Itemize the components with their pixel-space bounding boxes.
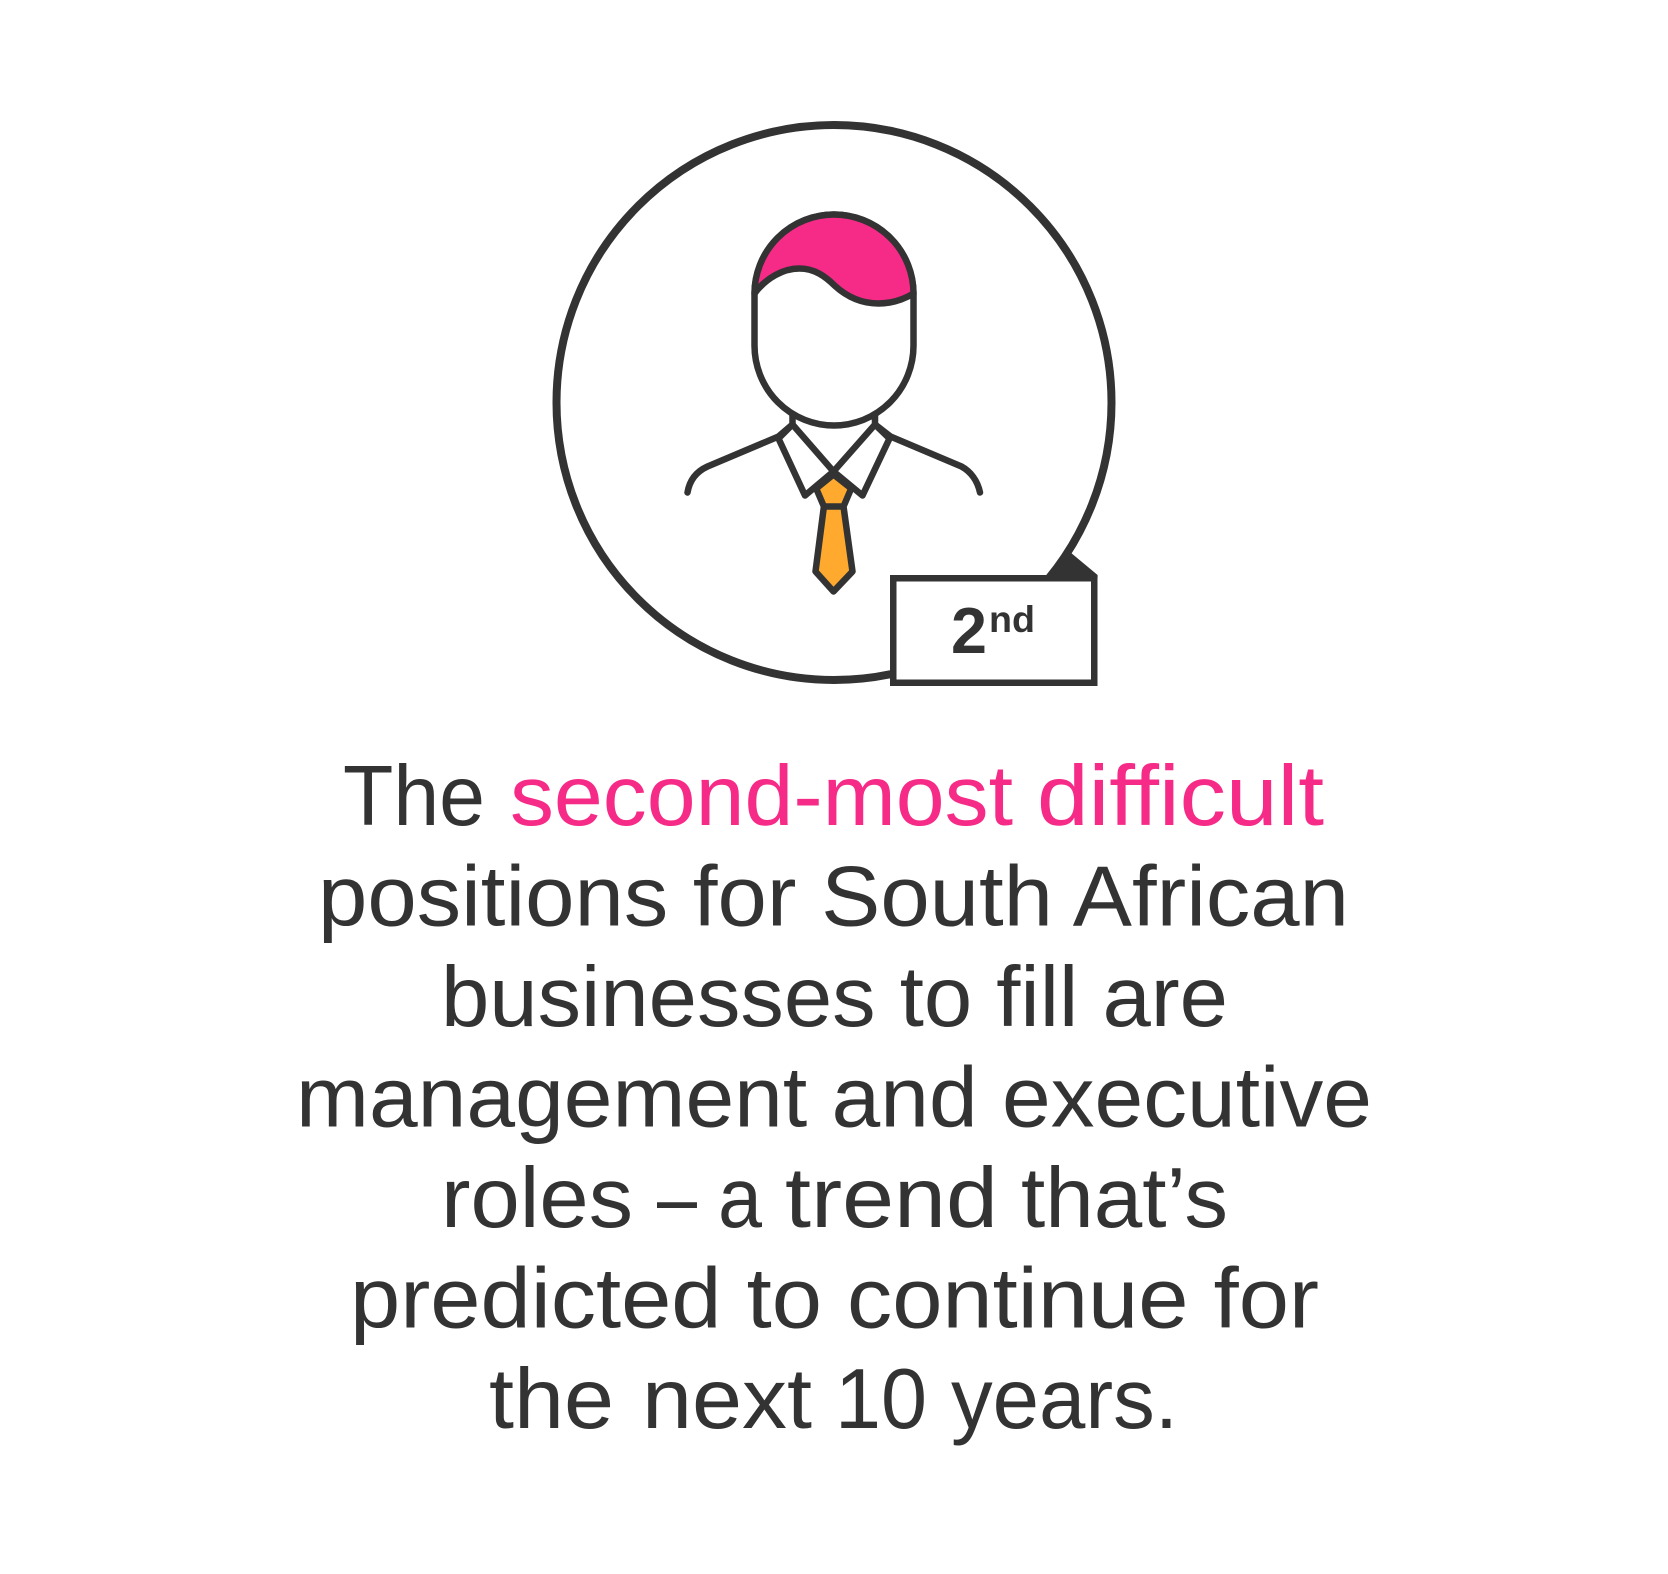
badge pointer triangle	[1046, 553, 1098, 578]
rank badge: nd	[989, 599, 1035, 640]
icon: person	[688, 214, 980, 592]
text block: main statement: roles	[441, 1151, 633, 1246]
necktie	[816, 474, 852, 592]
icon: manager in circle with rank badge	[556, 125, 1112, 683]
text block: main statement: trend	[785, 1151, 998, 1246]
text block: main statement: The	[343, 749, 485, 844]
text block: main statement: second-most	[510, 749, 1013, 844]
text block: main statement: predicted to continue for	[350, 1252, 1319, 1346]
text block: main statement: that’s	[1021, 1151, 1228, 1246]
text block: main statement: difficult	[1037, 749, 1324, 844]
shirt collar	[778, 424, 890, 496]
text block: main statement: –	[657, 1151, 698, 1246]
neck and shoulders	[688, 414, 980, 492]
hair	[754, 215, 914, 304]
text block: main statement: management and executive	[296, 1050, 1372, 1146]
text block: main statement: next	[642, 1352, 812, 1447]
badge label: 2	[951, 594, 987, 667]
text block: main statement: 10	[835, 1352, 927, 1447]
text block: main statement: years.	[951, 1352, 1178, 1447]
text block: main statement: a	[718, 1151, 763, 1246]
head	[754, 214, 914, 426]
text block: main statement	[296, 749, 1372, 1447]
rank badge	[893, 578, 1094, 683]
icon: outer circle	[556, 125, 1112, 680]
text block: main statement: businesses to fill are	[441, 950, 1228, 1045]
text block: main statement: positions for South African	[318, 850, 1349, 944]
text block: main statement: the	[489, 1352, 614, 1447]
